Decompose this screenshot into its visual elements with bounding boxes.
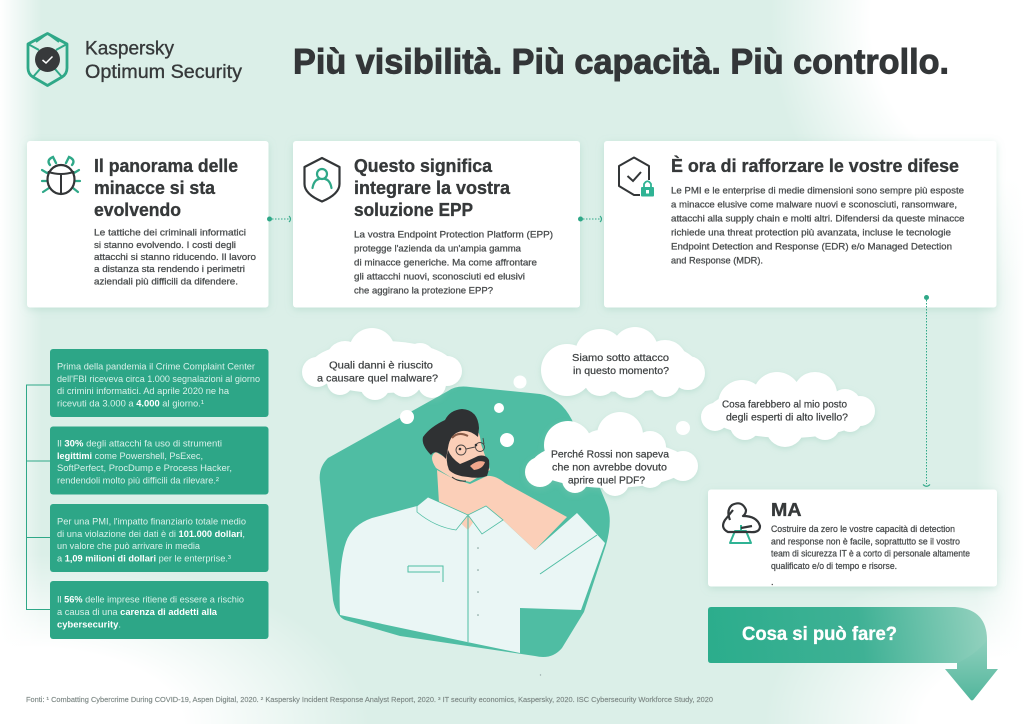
body text: and response non è facile, soprattutto se il vostro bbox=[771, 536, 960, 548]
logo: Kaspersky Optimum Security bbox=[28, 34, 243, 86]
question text: in questo momento? bbox=[573, 366, 669, 377]
hair bbox=[423, 409, 479, 459]
statistic text: Il 56% delle imprese ritiene di essere a rischio bbox=[57, 594, 244, 604]
question text: Siamo sotto attacco bbox=[572, 353, 669, 364]
statistic text: legittimi come Powershell, PsExec, bbox=[57, 451, 203, 461]
body text: Le PMI e le enterprise di medie dimensioni sono sempre più esposte bbox=[671, 186, 964, 196]
call to action text: Cosa si può fare? bbox=[742, 624, 897, 645]
mouth bbox=[470, 461, 485, 470]
statistic text: Per una PMI, l'impatto finanziario totale medio bbox=[57, 516, 246, 526]
question text: Quali danni è riuscito bbox=[329, 360, 433, 372]
heading: MA bbox=[771, 500, 802, 520]
cloud: experts question bbox=[701, 372, 875, 447]
heading: integrare la vostra bbox=[354, 177, 511, 198]
body text: qualificato e/o di tempo e risorse. bbox=[771, 561, 897, 572]
body text: La vostra Endpoint Protection Platform (EPP) bbox=[354, 229, 553, 240]
body text: protegge l'azienda da un'ampia gamma bbox=[354, 243, 522, 254]
face bbox=[432, 424, 490, 482]
statistic text: dell'FBI riceveva circa 1.000 segnalazioni al giorno bbox=[57, 374, 260, 384]
statistic text: Il 30% degli attacchi fa uso di strumenti bbox=[57, 438, 222, 448]
heading: Questo significa bbox=[354, 155, 493, 176]
question text bbox=[722, 400, 848, 424]
background hexagon bbox=[320, 386, 610, 657]
neck and arm bbox=[437, 470, 567, 550]
question text: Perché Rossi non sapeva bbox=[551, 450, 669, 460]
body text bbox=[771, 524, 970, 588]
statistic text bbox=[57, 516, 246, 563]
eyebrow, eye and glasses bbox=[452, 434, 484, 455]
call to action arrow bbox=[708, 607, 998, 700]
statistic text bbox=[57, 438, 232, 485]
cloud: under attack question bbox=[541, 327, 705, 398]
body text: . bbox=[771, 577, 774, 588]
statistic text: a causa di una carenza di addetti alla bbox=[57, 607, 218, 617]
cloud: PDF question bbox=[525, 412, 698, 496]
panel: statistic on complaints bbox=[50, 349, 268, 417]
statistic text: di crimini informatici. Ad aprile 2020 ne ha bbox=[57, 386, 230, 396]
icon: bug bbox=[42, 157, 80, 194]
icon: person at a laptop bbox=[723, 503, 760, 543]
body text: si stanno evolvendo. I costi degli bbox=[94, 240, 236, 251]
logo wordmark: Optimum Security bbox=[85, 62, 243, 83]
shirt collar bbox=[417, 497, 503, 534]
body text bbox=[354, 229, 553, 296]
statistic text: un valore che può arrivare in media bbox=[57, 541, 201, 551]
statistic text: di una violazione dei dati è di 101.000 dollari, bbox=[57, 529, 245, 539]
jaw shadow bbox=[452, 477, 466, 481]
icon: shield with padlock bbox=[619, 158, 654, 196]
decoration dot bbox=[540, 674, 541, 676]
heading bbox=[94, 155, 238, 220]
question text: Cosa farebbero al mio posto bbox=[722, 400, 847, 410]
body text: team di sicurezza IT è a corto di personale altamente bbox=[771, 548, 970, 560]
shirt bbox=[340, 497, 605, 653]
body text: aziendali più difficili da difendere. bbox=[94, 276, 238, 287]
panel: statistic on legitimate tools bbox=[50, 426, 268, 494]
heading: soluzione EPP bbox=[354, 199, 473, 220]
question text bbox=[317, 360, 438, 384]
body text: Endpoint Detection and Response (EDR) e/o Managed Detection bbox=[671, 242, 952, 252]
body text: a minacce elusive come malware nuovi e sconosciuti, ransomware, bbox=[671, 200, 957, 210]
body text: di minacce generiche. Ma come affrontare bbox=[354, 257, 537, 268]
statistic text: SoftPerfect, ProcDump e Process Hacker, bbox=[57, 463, 232, 473]
illustration: thoughtful man bbox=[320, 386, 610, 676]
statistic text: Prima della pandemia il Crime Complaint Center bbox=[57, 362, 255, 372]
logo wordmark: Kaspersky bbox=[85, 38, 174, 60]
logo wordmark bbox=[85, 38, 243, 83]
statistic text bbox=[57, 362, 260, 408]
statistic text: a 1,09 milioni di dollari per le enterprise.³ bbox=[57, 553, 231, 563]
sources footnote: Fonti: ¹ Combatting Cybercrime During COVID-19, Aspen Digital, 2020. ² Kaspersky Incident Response Analyst Report, 2020. ³ IT security economics, Kaspersky, 2020. ISC Cybersecurity Workforce Study, 2020 bbox=[26, 695, 713, 704]
statistic text: rendendoli molto più difficili da rilevare.² bbox=[57, 475, 219, 485]
panel: statistic on financial impact bbox=[50, 504, 268, 572]
body text bbox=[671, 186, 964, 266]
panel: statistic on staff shortage bbox=[50, 581, 268, 639]
panel: MA bbox=[708, 490, 997, 588]
arrow: panel 3 to MA panel bbox=[923, 295, 930, 486]
question text bbox=[551, 450, 669, 486]
question text bbox=[572, 353, 669, 377]
panel: strengthen defences bbox=[604, 141, 996, 308]
beard bbox=[447, 450, 489, 478]
body text: Le tattiche dei criminali informatici bbox=[94, 228, 246, 238]
panel: threat landscape bbox=[27, 141, 268, 308]
icon: shield bbox=[28, 34, 67, 86]
heading bbox=[354, 155, 511, 220]
icon: shield with user bbox=[304, 158, 340, 202]
panel: integrate EPP bbox=[293, 141, 580, 308]
connector tree for statistics bbox=[26, 385, 50, 610]
heading: evolvendo bbox=[94, 199, 181, 220]
question text: aprire quel PDF? bbox=[568, 476, 645, 486]
heading: È ora di rafforzare le vostre difese bbox=[671, 155, 959, 176]
heading: Il panorama delle bbox=[94, 155, 238, 176]
cloud: malware damage question bbox=[302, 328, 462, 400]
question text: che non avrebbe dovuto bbox=[552, 462, 667, 474]
body text: and Response (MDR). bbox=[671, 256, 763, 266]
title: Più visibilità. Più capacità. Più controllo. bbox=[293, 42, 949, 82]
shirt seams bbox=[408, 516, 597, 642]
body text: richiede una threat protection più avanzata, incluse le tecnologie bbox=[671, 228, 951, 238]
body text: attacchi si stanno riducendo. Il lavoro bbox=[94, 252, 256, 263]
thought bubbles dots bbox=[400, 376, 690, 447]
statistic text: cybersecurity. bbox=[57, 619, 121, 629]
heading: minacce si sta bbox=[94, 177, 216, 198]
body text: gli attacchi nuovi, sconosciuti ed elusivi bbox=[354, 271, 525, 282]
body text: Costruire da zero le vostre capacità di detection bbox=[771, 524, 955, 535]
body text bbox=[94, 228, 256, 287]
arrow: panel 2 to panel 3 bbox=[578, 216, 602, 222]
body text: attacchi alla supply chain e molti altri. Difendersi da queste minacce bbox=[671, 214, 964, 224]
body text: a distanza sta rendendo i perimetri bbox=[94, 264, 245, 275]
statistic text bbox=[57, 594, 244, 629]
question text: a causare quel malware? bbox=[317, 374, 438, 384]
arrow: panel 1 to panel 2 bbox=[267, 216, 290, 222]
shirt buttons bbox=[477, 547, 479, 616]
body text: che aggirano la protezione EPP? bbox=[354, 285, 493, 296]
question text: degli esperti di alto livello? bbox=[726, 412, 848, 424]
statistic text: ricevuti da 3.000 a 4.000 al giorno.¹ bbox=[57, 398, 204, 408]
